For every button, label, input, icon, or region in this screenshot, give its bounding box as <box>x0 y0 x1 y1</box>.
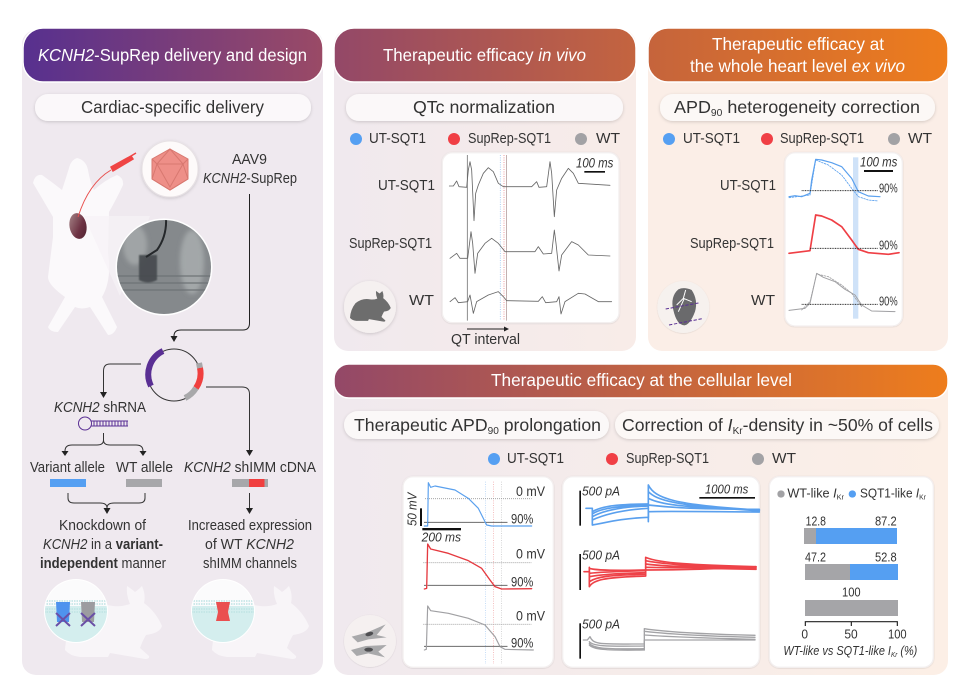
icon: rabbit <box>344 281 396 333</box>
label: UT-SQT1: UT-SQT1 <box>720 178 776 194</box>
label: variant allele: Variant allele <box>30 460 105 476</box>
subheading: APD90 prolongation: prolongation <box>499 415 601 435</box>
chart: IKr phenotype stacked bars: (%) <box>897 644 917 658</box>
chart: ECG traces <box>442 153 619 323</box>
chart: optical action potentials <box>785 153 902 326</box>
text: knockdown: independent manner <box>40 556 166 572</box>
chart: IKr phenotype stacked bars: 100 <box>888 626 907 641</box>
label: KCNH2 shIMM cDNA: KCNH2 shIMM cDNA <box>184 460 316 476</box>
arrow: plasmid to shIMM cDNA <box>206 387 253 456</box>
icon: shRNA hairpin <box>78 417 128 430</box>
chart: IKr phenotype stacked bars <box>769 477 933 667</box>
text: increased expression: shIMM channels <box>203 556 297 572</box>
icon: rabbit with knocked-down channels <box>44 579 162 659</box>
legend: cellular groups <box>488 451 796 467</box>
label: WT allele: WT allele <box>116 460 173 476</box>
subheading: APD90 prolongation <box>344 411 609 439</box>
panel: cellular level <box>334 364 948 675</box>
legend: IKr phenotype: Kr <box>919 493 927 502</box>
image: fluoroscopy <box>115 218 213 316</box>
annotation: QT interval: QT interval <box>451 332 520 348</box>
heading: whole heart <box>648 28 948 82</box>
chart: cellular action potentials: 90% <box>511 575 533 590</box>
legend: IKr phenotype: Kr <box>837 493 845 502</box>
legend: in vivo groups: UT-SQT1 <box>369 131 426 147</box>
subheading: APD90 heterogeneity correction: heterogeneity correction <box>722 97 920 117</box>
subheading: IKr density: Kr <box>733 426 743 437</box>
chart: IKr phenotype stacked bars: 47.2 <box>805 550 826 565</box>
chart: IKr phenotype stacked bars: 12.8 <box>806 514 826 529</box>
chart: cellular action potentials: 200 ms <box>421 530 461 545</box>
subheading: APD90 prolongation: 90 <box>488 426 499 437</box>
subheading: APD90 heterogeneity correction: APD <box>674 97 710 117</box>
icon: plasmid <box>148 349 201 401</box>
chart: IKr current traces: 500 pA <box>582 484 620 499</box>
arrow: AAV9 to plasmid <box>170 194 250 342</box>
label: WT: WT <box>751 293 775 309</box>
chart: IKr phenotype stacked bars: 87.2 <box>875 514 897 529</box>
arrow: plasmid to shRNA <box>100 364 141 398</box>
subheading: IKr density: -density in ~50% of cells <box>743 415 933 435</box>
label: SupRep-SQT1: SupRep-SQT1 <box>690 236 774 252</box>
chart: IKr current traces: 500 pA <box>582 616 620 631</box>
chart: cellular action potentials: 0 mV <box>516 484 546 499</box>
heading: whole heart: the whole heart level ex vivo <box>690 56 905 76</box>
legend: in vivo groups: WT <box>596 131 620 147</box>
chart: cellular action potentials <box>403 477 553 667</box>
legend: IKr phenotype <box>777 487 927 502</box>
legend: ex vivo groups: WT <box>908 131 932 147</box>
chart: optical action potentials: 100 ms <box>860 155 897 170</box>
chart: cellular action potentials: 0 mV <box>516 609 546 624</box>
panel: delivery and design <box>22 28 323 675</box>
subheading: cardiac-specific delivery: Cardiac-specific delivery <box>81 97 264 117</box>
panel: whole heart ex vivo <box>648 28 948 351</box>
bar: WT allele <box>126 479 162 487</box>
text: increased expression: Increased expression <box>188 518 312 534</box>
heading: in vivo <box>334 28 636 82</box>
icon: syringe and injection line <box>78 153 136 217</box>
chart: IKr phenotype stacked bars: 50 <box>844 626 858 641</box>
chart: optical action potentials: 90% <box>879 238 898 252</box>
label: WT: WT <box>409 293 434 309</box>
arrow: shRNA to both alleles <box>62 433 146 456</box>
subheading: APD90 prolongation: Therapeutic APD <box>354 415 486 435</box>
icon: cardiomyocytes <box>344 615 396 667</box>
icon: AAV9 capsid <box>142 141 198 197</box>
heading: whole heart: Therapeutic efficacy at <box>712 34 884 54</box>
bar: shIMM cDNA <box>232 479 268 487</box>
icon: rabbit with shIMM channel <box>191 579 309 659</box>
legend: ex vivo groups <box>663 131 932 147</box>
legend: IKr phenotype: SQT1-like I <box>860 487 919 501</box>
chart: optical action potentials: 90% <box>879 295 898 309</box>
chart: IKr current traces <box>563 477 759 667</box>
chart: optical action potentials: 90% <box>879 182 898 196</box>
heading: cellular level <box>334 364 948 398</box>
panel: therapeutic efficacy in vivo <box>334 28 636 351</box>
subheading: IKr density: Correction of I <box>622 415 733 435</box>
legend: in vivo groups: SupRep-SQT1 <box>468 131 551 147</box>
text: knockdown: KCNH2 in a variant- <box>43 537 163 553</box>
chart: ECG traces: 100 ms <box>576 155 613 170</box>
heading: cellular level: Therapeutic efficacy at the cellular level <box>491 370 792 390</box>
chart: IKr current traces: 500 pA <box>582 547 620 562</box>
chart: IKr phenotype stacked bars: Kr <box>891 650 898 659</box>
legend: cellular groups: UT-SQT1 <box>507 451 564 467</box>
text: knockdown: Knockdown of <box>59 518 147 534</box>
subheading: APD90 heterogeneity correction <box>660 94 935 121</box>
bracket: alleles to knockdown <box>68 493 145 514</box>
icon: heart <box>657 281 709 333</box>
heading: in vivo: Therapeutic efficacy in vivo <box>383 45 586 65</box>
text: increased expression: of WT KCNH2 <box>205 537 294 553</box>
subheading: cardiac-specific delivery <box>35 94 311 121</box>
text: increased expression <box>188 518 312 572</box>
icon: rabbit top view with heart <box>33 158 150 335</box>
subheading: QTc normalization <box>346 94 623 121</box>
subheading: QTc normalization: QTc normalization <box>413 97 555 117</box>
label: SupRep-SQT1: SupRep-SQT1 <box>349 236 432 252</box>
heading: delivery and design <box>23 28 323 82</box>
legend: IKr phenotype: WT-like I <box>787 487 837 501</box>
chart: IKr phenotype stacked bars: 0 <box>801 626 808 641</box>
label: UT-SQT1: UT-SQT1 <box>378 178 435 194</box>
legend: ex vivo groups: UT-SQT1 <box>683 131 740 147</box>
bar: variant allele <box>50 479 86 487</box>
chart: IKr phenotype stacked bars: 100 <box>842 585 861 600</box>
chart: cellular action potentials: 90% <box>511 511 533 526</box>
chart: cellular action potentials: 90% <box>511 636 533 651</box>
heading: delivery and design: KCNH2-SupRep delivery and design <box>38 45 307 65</box>
legend: in vivo groups <box>350 131 620 147</box>
label: AAV9 KCNH2-SupRep: AAV9 <box>232 152 267 168</box>
arrow: cDNA to expression <box>246 493 253 514</box>
legend: cellular groups: SupRep-SQT1 <box>626 451 709 467</box>
legend: ex vivo groups: SupRep-SQT1 <box>780 131 864 147</box>
subheading: IKr density <box>615 411 939 439</box>
chart: IKr current traces: 1000 ms <box>705 481 749 496</box>
label: AAV9 KCNH2-SupRep <box>203 152 297 187</box>
chart: IKr phenotype stacked bars: 52.8 <box>875 550 897 565</box>
chart: IKr phenotype stacked bars: WT-like vs SQT1-like I <box>783 644 908 658</box>
chart: cellular action potentials: 50 mV <box>404 492 419 526</box>
label: AAV9 KCNH2-SupRep: KCNH2-SupRep <box>203 171 297 187</box>
subheading: APD90 heterogeneity correction: 90 <box>711 108 723 119</box>
text: knockdown <box>40 518 166 572</box>
legend: cellular groups: WT <box>772 451 796 467</box>
chart: cellular action potentials: 0 mV <box>516 547 546 562</box>
label: KCNH2 shRNA: KCNH2 shRNA <box>54 400 146 416</box>
